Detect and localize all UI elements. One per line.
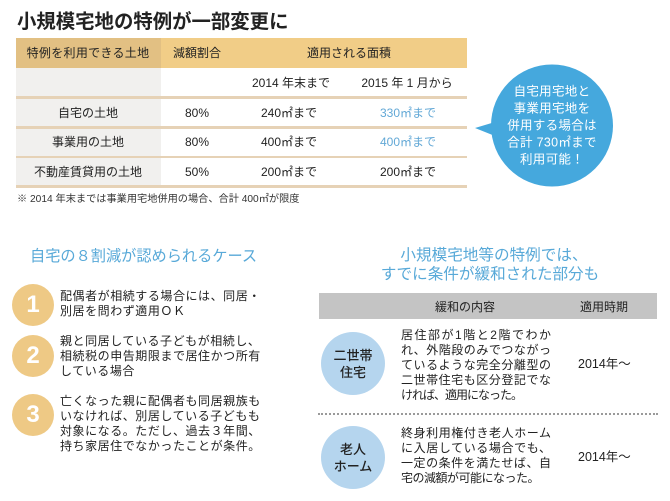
number circle 2: 2 <box>26 342 40 369</box>
text: two-generation housing: 居住部が1階と2階でわか <box>401 328 551 342</box>
case 1 text <box>60 289 261 318</box>
tag: two-generation housing: 二世帯 <box>333 348 372 362</box>
text: two-generation housing <box>401 328 551 402</box>
callout bubble: 自宅用宅地と <box>514 84 590 98</box>
row: business land: 事業用の土地 <box>52 135 124 149</box>
case 2 <box>12 334 261 378</box>
heading: 80% reduction cases: 自宅の８割減が認められるケース <box>30 248 257 265</box>
tag: nursing home <box>321 426 385 489</box>
text: two-generation housing: ければ、適用になった。 <box>401 388 522 402</box>
text: nursing home: に入居している場合でも、 <box>401 441 551 455</box>
text: nursing home: 終身利用権付き老人ホーム <box>401 426 551 440</box>
table footnote: ※ 2014 年末までは事業用宅地併用の場合、合計 400㎡が限度 <box>17 194 299 205</box>
period: nursing home: 2014年〜 <box>578 450 631 464</box>
case 2 text: 親と同居している子どもが相続し、 <box>60 334 260 348</box>
tag: two-generation housing: 住宅 <box>340 364 366 380</box>
callout bubble: 事業用宅地を <box>514 102 590 116</box>
tag: two-generation housing <box>321 332 385 395</box>
text: nursing home <box>401 426 551 485</box>
row: rental land: 不動産賃貸用の土地 <box>34 165 142 179</box>
text: nursing home: 一定の条件を満たせば、自 <box>401 456 551 470</box>
case 3 text: 持ち家居住でなかったことが条件。 <box>60 439 261 453</box>
number circle 2 <box>12 335 54 377</box>
row 2 area until 2014: 400㎡まで <box>261 135 317 149</box>
case 2 text: 相続税の申告期限まで居住かつ所有 <box>60 349 261 363</box>
number circle 1 <box>12 284 54 326</box>
row 1 rate: 80% <box>185 106 209 120</box>
case 3 text: いなければ、別居している子どもも <box>60 409 260 423</box>
case 1 <box>12 284 261 326</box>
header: relaxation content: 緩和の内容 <box>435 300 495 314</box>
callout bubble: 利用可能！ <box>520 152 584 166</box>
number circle 3 <box>12 394 54 436</box>
table header: reduction rate: 減額割合 <box>173 46 221 60</box>
period: two-generation housing: 2014年〜 <box>578 357 631 371</box>
number circle 3: 3 <box>26 401 40 428</box>
heading: relaxed conditions: すでに条件が緩和された部分も <box>381 266 599 283</box>
case 3 text: 対象になる。ただし、過去３年間、 <box>60 424 261 438</box>
row 1 area from 2015: 330㎡まで <box>380 106 436 120</box>
text: two-generation housing: 二世帯住宅も区分登記でな <box>401 373 551 387</box>
row 3 rate: 50% <box>185 165 209 179</box>
header: effective period: 適用時期 <box>580 300 628 314</box>
callout bubble: 併用する場合は <box>507 118 597 132</box>
tag: nursing home: 老人 <box>340 442 366 456</box>
heading: relaxed conditions <box>381 246 599 283</box>
case 3 <box>12 394 261 453</box>
row 3 area from 2015: 200㎡まで <box>380 165 436 179</box>
tag: nursing home: ホーム <box>334 458 372 474</box>
number circle 1: 1 <box>26 291 40 318</box>
row: own home land: 自宅の土地 <box>58 106 118 120</box>
callout bubble: 合計 730㎡まで <box>507 136 597 150</box>
text: two-generation housing: ているような完全分離型の <box>401 358 551 372</box>
callout bubble <box>475 64 613 186</box>
column label: until 2014: 2014 年末まで <box>252 76 330 90</box>
first column header cell <box>16 38 161 68</box>
table header row <box>16 38 467 68</box>
first column body <box>16 68 161 185</box>
grey table header <box>319 293 657 319</box>
case 2 text <box>60 334 261 378</box>
row 2 rate: 80% <box>185 135 209 149</box>
case 3 text: 亡くなった親に配偶者も同居親族も <box>60 394 261 408</box>
case 1 text: 配偶者が相続する場合には、同居・ <box>60 289 261 303</box>
title: 小規模宅地の特例が一部変更に <box>17 11 288 33</box>
dotted divider <box>318 413 658 415</box>
table header: land: 特例を利用できる土地 <box>27 46 149 60</box>
text: nursing home: 宅の減額が可能になった。 <box>401 471 539 485</box>
row 2 area from 2015: 400㎡まで <box>380 135 436 149</box>
case 3 text <box>60 394 261 453</box>
text: two-generation housing: れ、外階段のみでつながっ <box>401 343 551 357</box>
table header: area: 適用される面積 <box>307 46 391 60</box>
case 2 text: している場合 <box>60 364 135 378</box>
heading: relaxed conditions: 小規模宅地等の特例では、 <box>400 247 588 264</box>
case 1 text: 別居を問わず適用ＯＫ <box>60 304 186 318</box>
column label: from 2015: 2015 年 1 月から <box>361 76 453 90</box>
row 1 area until 2014: 240㎡まで <box>261 106 317 120</box>
table: special provision land <box>16 38 467 188</box>
row 3 area until 2014: 200㎡まで <box>261 165 317 179</box>
